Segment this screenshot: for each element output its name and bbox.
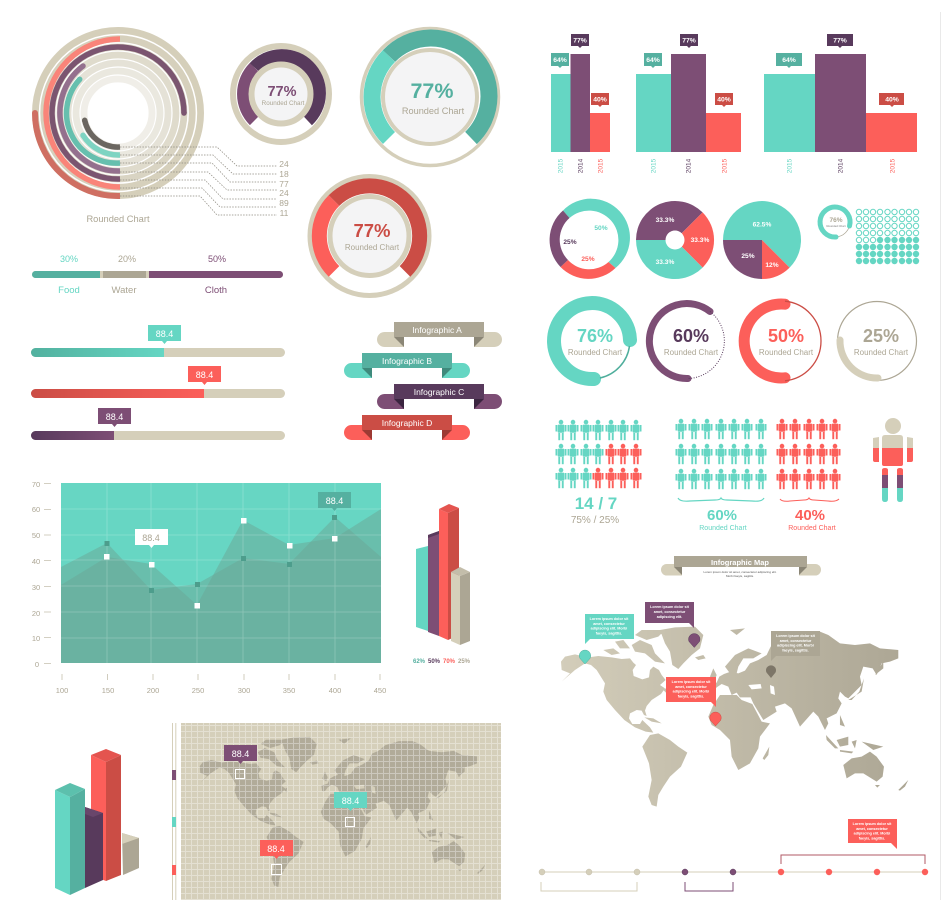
- year labels: [650, 158, 728, 173]
- caption: Rounded Chart: [788, 525, 836, 532]
- ribbon: Infographic C: [377, 384, 502, 409]
- small ring 76%: [820, 207, 850, 237]
- grid overlay: [181, 723, 501, 900]
- bars: [636, 54, 741, 152]
- pictogram: 60%: [676, 419, 766, 532]
- year labels: 2014: [578, 158, 584, 173]
- bar chart medium: [636, 34, 741, 173]
- ribbon: Infographic Map: Lorem ipsum dolor sit amet, consectetur adipiscing elit.: [703, 570, 777, 574]
- gauge: purple 77%: 77%: [267, 84, 297, 100]
- percent split: 75% / 25%: [571, 515, 619, 526]
- gauge: teal 77%: Rounded Chart: [402, 106, 465, 116]
- ribbon: Infographic D: [344, 415, 470, 440]
- pin: red: [710, 712, 721, 726]
- callout: purple: Lorem ipsum dolor sit: [650, 605, 690, 609]
- world map: [561, 602, 908, 807]
- ratio: 14 / 7: [575, 494, 617, 513]
- ribbon: Infographic A: [377, 322, 502, 347]
- progress bar: purple: 88.4: [106, 412, 123, 422]
- value tags: 77%: [833, 38, 847, 44]
- callout: grey: adipiscing elit. Morbi: [777, 644, 814, 648]
- ring arcs: [35, 39, 184, 196]
- gauge: red 77%: [310, 176, 429, 296]
- gauge: teal 77%: 77%: [410, 79, 454, 103]
- percent labels: [60, 254, 226, 264]
- year labels: [786, 158, 896, 173]
- isometric bars: small: [413, 504, 471, 665]
- gauge: red 77%: 77%: [353, 220, 391, 241]
- bar legend: 25%: [458, 659, 471, 665]
- bracket: tan: [541, 882, 637, 891]
- x axis: 100: [56, 686, 68, 695]
- year labels: 2015: [890, 158, 896, 173]
- ring values: 24: [279, 159, 289, 169]
- donut pie: 50 25 25: 25%: [563, 239, 577, 246]
- panel: concentric rounded chart: [32, 30, 289, 224]
- callout: grey: faeyis, sagittis.: [782, 648, 809, 652]
- percent labels: 50%: [208, 254, 226, 264]
- marker: red: [260, 840, 293, 874]
- red bar: [439, 504, 459, 640]
- callout: mint: [585, 614, 634, 644]
- y axis: 40: [32, 557, 40, 566]
- ring values: 11: [280, 208, 289, 218]
- mint bar: [416, 546, 428, 631]
- percent labels: 20%: [118, 254, 136, 264]
- category labels: Water: [112, 285, 136, 296]
- pin: grey: [766, 665, 776, 678]
- pictogram: 14 / 7: [556, 420, 642, 526]
- panel: textured world map: [172, 723, 501, 900]
- pin: purple: [689, 634, 700, 648]
- x axis: 150: [102, 686, 114, 695]
- x axis: 250: [192, 686, 204, 695]
- value tags: 40%: [717, 96, 731, 104]
- ribbon: Infographic Map: Morbi faeyis, sagittis.: [726, 574, 754, 578]
- progress bar: red: 88.4: [196, 370, 213, 380]
- rounded ring 50%: 50%: [768, 326, 804, 346]
- purple nodes: [682, 869, 736, 875]
- ring values: [279, 159, 289, 218]
- y axis: 70: [32, 480, 40, 489]
- caption: Rounded Chart: [86, 214, 150, 224]
- ring values: 89: [279, 198, 289, 208]
- panel: segmented bar Food Water Cloth: [32, 254, 283, 296]
- brace: [678, 498, 764, 501]
- rounded ring 60%: [649, 304, 724, 379]
- gauge: purple 77%: Rounded Chart: [262, 100, 305, 107]
- value tags: 77%: [573, 38, 587, 44]
- category labels: [58, 285, 227, 296]
- callout: red: adipiscing elit. Morbi: [673, 690, 709, 694]
- pie: 62.5 25 12: 12%: [765, 262, 779, 269]
- progress bar: red: [31, 366, 285, 398]
- front area series: [61, 509, 381, 663]
- callout: timeline: [848, 819, 897, 849]
- x axis: 300: [238, 686, 250, 695]
- red nodes: [778, 869, 928, 875]
- ring values: 24: [279, 188, 289, 198]
- category labels: Cloth: [205, 285, 227, 296]
- year labels: 2014: [838, 158, 844, 173]
- pie: thirds with hole: [636, 201, 714, 279]
- isometric bars: large: [55, 749, 139, 895]
- red people: [592, 444, 642, 488]
- y axis: [32, 480, 51, 669]
- ring end caps: [32, 63, 187, 138]
- value tags: 64%: [782, 57, 796, 64]
- pie: 62.5 25 12: [723, 201, 801, 279]
- callout: timeline: faeyis, sagittis.: [859, 836, 885, 840]
- concentric background rings: [35, 30, 201, 196]
- marker: purple: [224, 745, 257, 778]
- pie: 62.5 25 12: 62.5%: [753, 222, 771, 228]
- callout: red: amet, consectetur: [675, 685, 707, 689]
- bar legend: 70%: [443, 659, 456, 665]
- bracket: red: [781, 855, 925, 864]
- progress bar: teal: 88.4: [156, 329, 173, 339]
- ribbon: Infographic D: Infographic D: [382, 418, 432, 428]
- map background: [181, 723, 501, 900]
- bar legend: 50%: [428, 659, 441, 665]
- callout: purple: amet, consectetur: [654, 610, 686, 614]
- value tags: 64%: [646, 57, 660, 64]
- dark data points: [104, 515, 337, 593]
- x axis: 450: [374, 686, 386, 695]
- axis line: [542, 871, 925, 873]
- bar legend: 62%: [413, 659, 426, 665]
- callout: purple: adipiscing elit.: [657, 615, 682, 619]
- x axis: 350: [283, 686, 295, 695]
- ribbon: Infographic C: Infographic C: [414, 387, 464, 397]
- rounded ring 50%: Rounded Chart: [759, 348, 814, 357]
- callout: red: Lorem ipsum dolor sit: [672, 680, 711, 684]
- callout: mint: faeyis, sagittis.: [596, 632, 622, 636]
- callout: mint: amet, consectetur: [593, 622, 625, 626]
- value tags: [551, 34, 609, 107]
- grid lines: [61, 483, 381, 663]
- ring values: 77: [279, 179, 289, 189]
- continents: [200, 737, 485, 887]
- bar legend: [413, 659, 471, 665]
- gauge: teal 77%: [362, 28, 498, 166]
- value tags: 40%: [885, 96, 899, 104]
- category labels: Food: [58, 285, 80, 296]
- marker: mint: 88.4: [342, 796, 359, 806]
- ribbon: Infographic Map: [661, 556, 821, 578]
- pie: 62.5 25 12: 25%: [741, 253, 755, 260]
- open dots: [856, 209, 919, 243]
- gauge: red 77%: Rounded Chart: [345, 243, 400, 252]
- rounded ring 76%: Rounded Chart: [568, 348, 623, 357]
- tan nodes: [539, 869, 640, 875]
- callout: timeline: amet, consectetur: [856, 827, 888, 831]
- ribbon: Infographic A: Infographic A: [412, 325, 462, 335]
- callout: mint: Lorem ipsum dolor sit: [590, 617, 629, 621]
- year labels: 2015: [650, 158, 658, 173]
- plot background: [61, 483, 381, 663]
- marker: red: 88.4: [267, 844, 285, 854]
- tag: dark value: [318, 492, 351, 511]
- callout: red: faeyis, sagittis.: [678, 694, 704, 698]
- purple bar: [428, 531, 439, 636]
- white data points: [104, 518, 338, 608]
- pie: thirds with hole: 33.3%: [656, 259, 674, 266]
- bars: [764, 54, 917, 152]
- tag: white value: 88.4: [142, 533, 160, 543]
- y axis: 0: [35, 660, 39, 669]
- red people: [776, 419, 840, 489]
- teal people: [676, 419, 766, 489]
- pin: mint: [579, 650, 591, 664]
- gauge: purple 77%: [233, 46, 329, 142]
- callout: red: [666, 677, 716, 707]
- tag: white value: [135, 529, 168, 548]
- donut pie: 50 25 25: 50%: [594, 225, 608, 232]
- filled dots: [856, 237, 919, 264]
- continents: [561, 627, 908, 807]
- back area series: [61, 517, 381, 663]
- y axis: 10: [32, 634, 40, 643]
- marker: mint: [334, 792, 367, 826]
- area chart: [32, 480, 386, 695]
- callout: purple: [645, 602, 694, 628]
- value tags: 64%: [553, 57, 567, 64]
- dot matrix: [856, 209, 919, 264]
- bars: [551, 54, 610, 152]
- year labels: 2014: [686, 158, 692, 173]
- percent labels: 30%: [60, 254, 78, 264]
- y axis: 30: [32, 583, 40, 592]
- year labels: 2015: [786, 158, 794, 173]
- marker: purple: 88.4: [232, 749, 249, 759]
- ribbon: Infographic Map: Infographic Map: [711, 558, 769, 567]
- teal people: [556, 420, 642, 488]
- small ring 76%: Rounded Chart: [827, 224, 846, 228]
- value tags: [776, 34, 904, 107]
- pictogram: 40%: [776, 419, 840, 532]
- large person icon: [873, 418, 913, 502]
- donut pie: 50 25 25: [550, 199, 630, 279]
- rounded ring 76%: [554, 303, 630, 379]
- bracket: purple: [685, 882, 733, 891]
- donut pie: 50 25 25: 25%: [581, 256, 595, 263]
- ribbon: Infographic B: Infographic B: [382, 356, 432, 366]
- value tags: 40%: [593, 96, 607, 104]
- rounded ring 60%: 60%: [673, 326, 709, 346]
- x axis: 200: [147, 686, 159, 695]
- callout: timeline: adipiscing elit. Morbi: [854, 832, 890, 836]
- callout: grey: Lorem ipsum dolor sit: [776, 634, 816, 638]
- callout: mint: adipiscing elit. Morbi: [591, 626, 627, 630]
- brace: [780, 498, 839, 501]
- red bar: [91, 749, 121, 881]
- ring values: 18: [279, 169, 289, 179]
- tag: dark value: 88.4: [326, 496, 343, 506]
- year labels: [558, 158, 604, 173]
- ribbon: Infographic B: [344, 353, 470, 378]
- mint bar: [55, 783, 85, 895]
- percent: 40%: [795, 507, 825, 524]
- page edge strip: [940, 12, 941, 900]
- tan bar: [451, 567, 470, 645]
- y axis: 20: [32, 609, 40, 618]
- y axis: 60: [32, 505, 40, 514]
- y axis: 50: [32, 531, 40, 540]
- x axis: [56, 674, 386, 695]
- rounded ring 25%: [838, 302, 916, 380]
- progress bar: purple: [31, 408, 285, 440]
- rounded ring 50%: [744, 301, 821, 381]
- year labels: 2015: [722, 158, 728, 173]
- rounded ring 60%: Rounded Chart: [664, 348, 719, 357]
- timeline: [539, 819, 928, 891]
- leader lines: [120, 147, 277, 215]
- side rail: [172, 723, 176, 900]
- x axis: 400: [329, 686, 341, 695]
- rounded ring 76%: 76%: [577, 326, 613, 346]
- tan bar: [122, 833, 139, 875]
- percent: 60%: [707, 507, 737, 524]
- callout: grey: amet, consectetur: [780, 639, 812, 643]
- pie: thirds with hole: 33.3%: [691, 237, 709, 244]
- year labels: 2015: [598, 158, 604, 173]
- bar chart wide: [764, 34, 917, 173]
- year labels: 2015: [558, 158, 564, 173]
- callout: timeline: Lorem ipsum dolor sit: [853, 822, 892, 826]
- callout: grey: [771, 631, 820, 661]
- value tags: [644, 34, 733, 107]
- value tags: 77%: [682, 38, 696, 44]
- bar chart narrow: [551, 34, 610, 173]
- pie: thirds with hole: 33.3%: [656, 217, 674, 224]
- bar segments: [32, 271, 283, 278]
- dark purple bar: [85, 807, 103, 888]
- rounded ring 25%: Rounded Chart: [854, 348, 909, 357]
- rounded ring 25%: 25%: [863, 326, 899, 346]
- caption: Rounded Chart: [699, 525, 747, 532]
- small ring 76%: 76%: [829, 217, 843, 224]
- progress bar: teal: [31, 325, 285, 357]
